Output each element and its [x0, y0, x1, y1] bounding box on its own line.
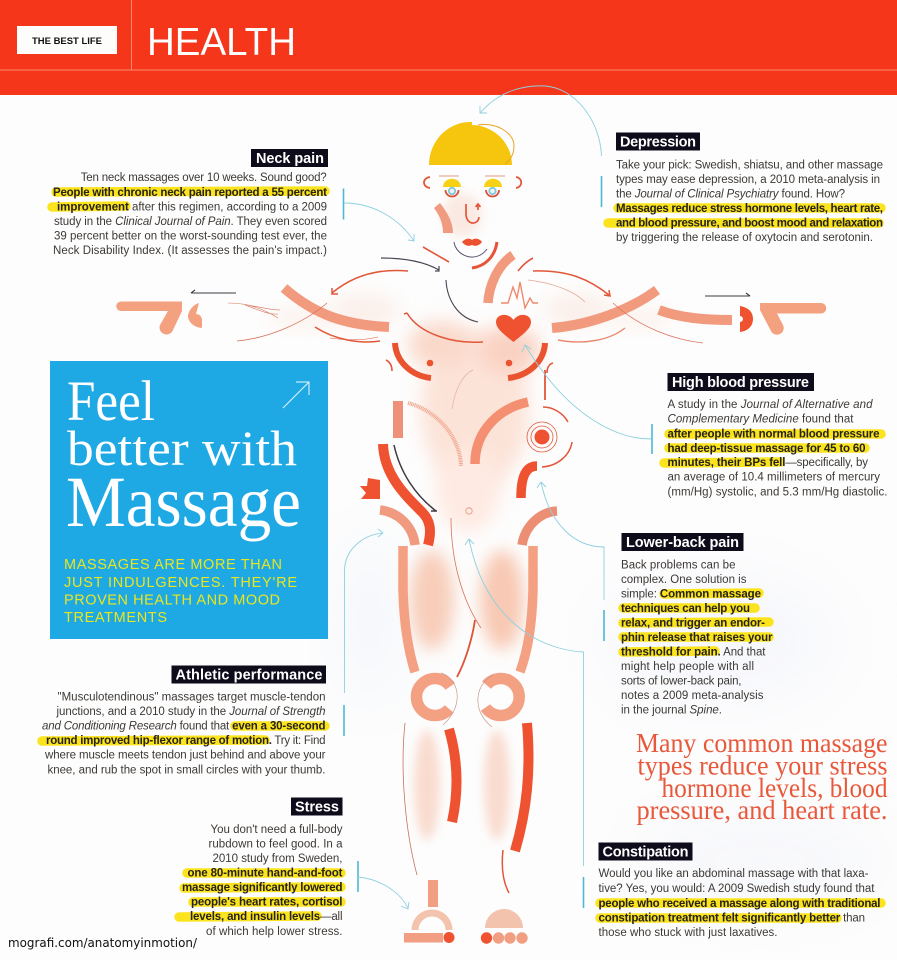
panel: depression [608, 132, 883, 244]
icon: heart [496, 315, 531, 342]
headline: Feel [67, 370, 155, 433]
text block: 2010 study from Sweden, [212, 853, 342, 865]
text block: Complementary Medicine found that [668, 414, 854, 426]
subheading: JUST INDULGENCES. THEY'RE [64, 575, 297, 591]
text block: those who stuck with just laxatives. [598, 927, 778, 939]
text block: of which help lower stress. [206, 926, 342, 938]
icon: heartbeat line [501, 282, 538, 308]
text block: one 80-minute hand-and-foot [188, 868, 343, 880]
text block: knee, and rub the spot in small circles with your thumb. [48, 764, 326, 776]
section title: HEALTH [147, 21, 296, 64]
text block: after people with normal blood pressure [668, 428, 880, 440]
panel: constipation [598, 842, 881, 939]
left foot [404, 880, 454, 943]
highlight strokes [623, 593, 769, 652]
thighs [403, 518, 533, 677]
text block: complex. One solution is [621, 574, 747, 586]
text block: junctions, and a 2010 study in the Journal of Strength [56, 706, 326, 718]
text block: People with chronic neck pain reported a 55 percent [53, 187, 327, 199]
text block: by triggering the release of oxytocin and serotonin. [616, 232, 873, 244]
text block: techniques can help you [621, 603, 750, 615]
text block: phin release that raises your [621, 632, 773, 644]
section tag [17, 26, 117, 54]
hip target [521, 370, 572, 498]
head: eyes [439, 176, 505, 196]
text block: Ten neck massages over 10 weeks. Sound good? [81, 172, 327, 184]
text block: types may ease depression, a 2010 meta-analysis in [616, 174, 880, 186]
subheading: PROVEN HEALTH AND MOOD [64, 592, 280, 608]
heading: Neck pain [256, 151, 324, 167]
text block: You don't need a full-body [210, 824, 343, 836]
text block: Back problems can be [621, 560, 736, 572]
text block [42, 692, 326, 776]
text block: 39 percent better on the worst-sounding test ever, the [54, 230, 327, 242]
section tag: THE BEST LIFE [32, 36, 102, 47]
headline: better with [67, 420, 297, 476]
knees [409, 671, 527, 727]
callout quote: types reduce your stress [638, 750, 888, 780]
text block: and Conditioning Research found that even a 30-second [42, 720, 326, 732]
text block: might help people with all [621, 661, 754, 673]
text block [598, 868, 880, 939]
torso: abdomen bands [393, 401, 528, 466]
soft body shading [269, 193, 672, 840]
panel: lower-back pain [621, 533, 773, 716]
panel: stress [179, 798, 343, 938]
source credit: mografi.com/anatomyinmotion/ [8, 935, 198, 950]
callout quote: hormone levels, blood [662, 773, 888, 803]
text block [668, 399, 888, 498]
text block: threshold for pain. And that [621, 646, 766, 658]
text block: in the journal Spine. [621, 704, 722, 716]
text block: massage significantly lowered [182, 882, 342, 894]
heading: Depression [620, 134, 696, 150]
chest arcs and nipples [386, 343, 553, 409]
text block [182, 824, 343, 938]
head: lips [462, 239, 482, 246]
head: jaw lines [381, 242, 497, 322]
text block: minutes, their BPs fell—specifically, by [668, 457, 868, 469]
subheading [64, 557, 297, 626]
heading: Athletic performance [176, 668, 322, 684]
headline [66, 370, 301, 542]
text block: had deep-tissue massage for 45 to 60 [668, 443, 866, 455]
panel: neck pain [52, 149, 328, 257]
shoulder band and chest lines [332, 255, 610, 342]
subheading: TREATMENTS [64, 610, 167, 626]
text block: levels, and insulin levels—all [190, 911, 342, 923]
arrow: high blood pressure connector [522, 345, 652, 454]
text block: relax, and trigger an endor- [621, 618, 765, 630]
arrow: depression connector [480, 86, 602, 207]
header banner [0, 0, 897, 95]
text block: constipation treatment felt significantly better than [598, 912, 865, 924]
heading: Stress [295, 800, 339, 816]
right arm [552, 290, 750, 343]
text block [53, 172, 327, 257]
panel: athletic performance [42, 666, 326, 776]
head: hair [429, 122, 514, 165]
arrow: athletic performance connector [344, 529, 383, 736]
text block: sorts of lower-back pain, [621, 676, 742, 688]
left arm [191, 288, 389, 342]
arrow: constipation connector [465, 539, 584, 908]
torso: left flank with arrow [360, 444, 437, 545]
left hand [116, 302, 202, 334]
text block: simple: Common massage [621, 588, 761, 600]
head: cheek band [434, 203, 453, 233]
callout quote: pressure, and heart rate. [636, 795, 888, 825]
text block: where muscle meets tendon just behind and above your [44, 750, 326, 762]
heading: Constipation [602, 844, 688, 860]
highlight strokes [600, 903, 881, 918]
panel: high blood pressure [664, 373, 888, 498]
headline: Massage [66, 462, 301, 542]
highlight strokes [179, 873, 341, 917]
text block: an average of 10.4 millimeters of mercury [668, 472, 880, 484]
text block: Take your pick: Swedish, shiatsu, and other massage [616, 160, 883, 172]
right hand [740, 303, 826, 335]
lower legs [403, 723, 528, 893]
highlight strokes [664, 434, 881, 463]
text block: people who received a massage along with traditional [598, 898, 880, 910]
text block: notes a 2009 meta-analysis [621, 690, 764, 702]
right foot [481, 909, 528, 944]
text block: (mm/Hg) systolic, and 5.3 mm/Hg diastolic. [668, 486, 888, 498]
icon: diagonal arrow [283, 382, 309, 408]
text block: people's heart rates, cortisol [191, 896, 342, 908]
highlight strokes [608, 208, 881, 223]
callout quote [636, 728, 888, 825]
callout quote: Many common massage [636, 728, 888, 758]
text block: Neck Disability Index. (It assesses the pain's impact.) [53, 245, 327, 257]
text block: Would you like an abdominal massage with that laxa- [598, 868, 869, 880]
text block: A study in the Journal of Alternative and [668, 399, 873, 411]
text block: and blood pressure, and boost mood and relaxation [616, 218, 883, 230]
text block [621, 560, 773, 716]
head: nose [466, 204, 480, 223]
panel: feel better with massage [50, 361, 328, 639]
highlight strokes [42, 726, 325, 741]
text block: study in the Clinical Journal of Pain. They even scored [54, 216, 327, 228]
heading: Lower-back pain [626, 535, 739, 551]
text block: "Musculotendinous" massages target muscle-tendon [58, 692, 326, 704]
text block: round improved hip-flexor range of motion. Try it: Find [46, 735, 326, 747]
text block [616, 160, 883, 244]
anatomy figure [116, 122, 826, 944]
arrow: neck pain connector [344, 188, 414, 241]
arrow: lower-back pain connector [537, 482, 604, 641]
subheading: MASSAGES ARE MORE THAN [64, 557, 282, 573]
highlight strokes [52, 191, 325, 207]
text block: rubdown to feel good. In a [208, 838, 343, 850]
text block: the Journal of Clinical Psychiatry found. How? [616, 188, 845, 200]
text block: improvement after this regimen, according to a 2009 [57, 202, 327, 214]
text block: Massages reduce stress hormone levels, heart rate, [616, 203, 883, 215]
head: ears [424, 177, 521, 188]
text block: tive? Yes, you would: A 2009 Swedish study found that [598, 883, 875, 895]
heading: High blood pressure [672, 375, 809, 391]
navel [466, 508, 472, 514]
arrow: stress connector [358, 861, 409, 909]
hips [380, 510, 557, 545]
